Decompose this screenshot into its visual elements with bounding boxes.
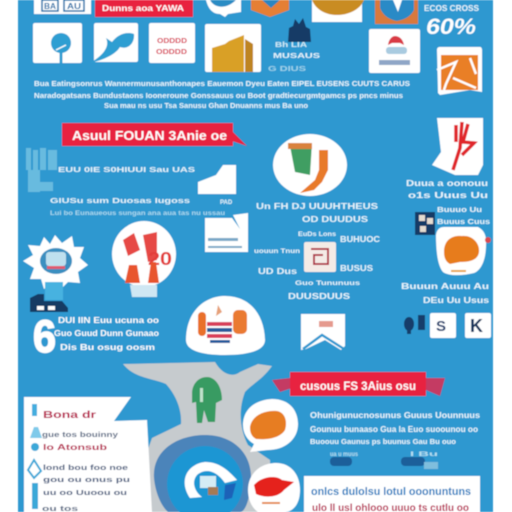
icon: white label tile bbox=[34, 0, 91, 14]
icon: starburst badge bbox=[23, 235, 88, 300]
icons: small tiles row bbox=[404, 313, 491, 338]
top row of icons bbox=[34, 0, 418, 24]
intro paragraph: Naradogatsans Bundustaons Iooneroune Gonssauus ou Boot gradtiecurgmtgamcs ps pncs minus bbox=[34, 91, 403, 100]
center top label group bbox=[268, 18, 320, 73]
top right statistic: 60% bbox=[426, 14, 476, 39]
center text block: DUUSDUUS bbox=[288, 292, 351, 301]
right text block: Buuuo Uu bbox=[437, 207, 482, 214]
bottom-left white panel: lond bou foo noe bbox=[43, 465, 128, 472]
left text block: EUU 0IE S0HIUUI Sau UAS bbox=[58, 165, 195, 174]
icon: red text tile: ODDDD bbox=[157, 38, 187, 45]
center text block: OD DUUDUS bbox=[302, 215, 369, 224]
center text block: EuDs Lons bbox=[298, 231, 336, 238]
left text block: Lui bo Eunaueous sungan ana aua tas nu ussau bbox=[50, 211, 225, 217]
icon: dark silhouette bbox=[288, 18, 311, 42]
right text block: Buuun Auuu Au bbox=[401, 281, 489, 291]
gray tree backdrop bbox=[123, 362, 272, 512]
center text block: Un FH DJ UUUHTHEUS bbox=[256, 202, 379, 211]
icon: blue tree tile bbox=[33, 23, 82, 63]
intro paragraph: Bua Eatingsonrus Wannermunusanthonapes Eauemon Dyeu Eaten EIPEL EUSENS CUUTS CARUS bbox=[34, 79, 410, 88]
icon: white label tile: AU bbox=[67, 2, 81, 11]
icon: orange bubble bbox=[243, 399, 298, 452]
icon: red cap card bbox=[369, 29, 420, 73]
large numeral with text: DUI IIN Euu ucuna oo bbox=[58, 315, 159, 325]
icon: K tile: K bbox=[470, 316, 483, 336]
bottom-left white panel bbox=[24, 397, 152, 512]
small pills bbox=[330, 457, 438, 469]
second row tiles bbox=[33, 23, 261, 72]
icon: white label tile: BA bbox=[44, 2, 56, 11]
top right statistic bbox=[424, 3, 479, 39]
right lower paragraph: ua u muus bbox=[330, 452, 359, 458]
large numeral with text bbox=[33, 311, 159, 362]
icon: gold buildings tile bbox=[205, 24, 261, 72]
bottom-left white panel: lo Atonsub bbox=[43, 443, 107, 452]
bottom-left white panel: uu oo Uuoou ou bbox=[43, 490, 127, 497]
icon: red spiral tile bbox=[304, 242, 336, 272]
bottom-left white panel: gue tos bouinny bbox=[42, 432, 118, 439]
section banner: left: Asuul FOUAN 3Anie oe bbox=[72, 128, 227, 143]
center text block: BUHUOC bbox=[340, 235, 380, 244]
icon: gold bowl bbox=[312, 0, 364, 22]
large numeral with text: Guo Guud Dunn Gunaao bbox=[54, 328, 159, 338]
left text block: GIUSu sum Duosas Iugoss bbox=[50, 196, 190, 205]
top right statistic: ECOS CROSS bbox=[424, 3, 479, 13]
center text block: uouun Tnun bbox=[254, 249, 300, 255]
right lower paragraph bbox=[310, 411, 481, 458]
icon: white notch shape: PAD bbox=[220, 200, 233, 206]
center top label group: G DIUS bbox=[268, 66, 307, 73]
icon: red text tile bbox=[149, 23, 195, 63]
right lower paragraph: Gounuu bunaaso Gua Ia Euo suoounou oo bbox=[310, 425, 478, 434]
left text block bbox=[50, 165, 225, 217]
icon: code tile: S bbox=[436, 318, 446, 335]
icon: red circle illustration bbox=[112, 221, 176, 297]
icon: orange tile bbox=[437, 47, 482, 95]
center text block: BUSUS bbox=[340, 264, 374, 273]
center text block: UD Dus bbox=[258, 267, 298, 276]
icon: dark vehicle bbox=[30, 294, 68, 312]
icon: red bubble bbox=[248, 463, 300, 512]
icon: dark drops bbox=[404, 315, 425, 334]
icon: white notch shape bbox=[198, 165, 236, 206]
top red banner: Dunns aoa YAWA bbox=[102, 4, 184, 13]
bottom-left white panel: gou ou onus pu bbox=[43, 477, 130, 484]
icon: red circle illustration: 20 bbox=[148, 249, 172, 269]
icon: blue swoosh tile bbox=[90, 23, 138, 63]
intro paragraph: Sua mau ns usu Tsa Sanusu Ghan Dnuanns mus Ba uno bbox=[104, 101, 308, 110]
icon: blue circular badge bbox=[154, 435, 251, 512]
center top label group: Bh LIA bbox=[275, 42, 307, 49]
icon: green figure bbox=[192, 377, 222, 423]
large numeral with text: 6 bbox=[33, 311, 56, 362]
top red banner bbox=[95, 0, 193, 17]
icon: white pointer card bbox=[205, 213, 248, 252]
large numeral with text: Dis Bu osug oosm bbox=[60, 342, 156, 352]
section banner: right bbox=[272, 372, 445, 396]
center text block: Guo Tununuus bbox=[295, 280, 361, 287]
icon: orange shield right bbox=[375, 0, 418, 24]
icon: blue crest bbox=[206, 0, 241, 17]
center top label group: MUSAUS bbox=[273, 53, 320, 60]
right text block bbox=[401, 178, 490, 305]
icon: white shield with red mark bbox=[432, 118, 483, 175]
icon: dark code block bbox=[415, 212, 435, 235]
right lower paragraph: Buoouu Gaunus ps buunus Gau Bu ouo bbox=[310, 439, 456, 446]
right lower paragraph: I Bu bbox=[410, 452, 439, 458]
icon: orange blob tile bbox=[436, 227, 491, 275]
bottom-right white panel bbox=[304, 476, 480, 512]
bottom-left white panel: Bona dr bbox=[43, 410, 96, 421]
right text block: o1s Uuus Uu bbox=[408, 190, 488, 200]
right lower paragraph: Ohunigunucnosunus Guuus Uounnuus bbox=[310, 411, 481, 420]
right text block: Duua a oonouu bbox=[406, 178, 488, 188]
bottom-right white panel: onlcs dulolsu lotul ooonuntuns bbox=[311, 486, 471, 498]
intro paragraph bbox=[34, 79, 410, 110]
icon: white blob with clothing bbox=[186, 296, 265, 355]
center text block bbox=[254, 202, 380, 301]
section banner: left bbox=[62, 123, 247, 146]
right text block: DEu Uu Usus bbox=[423, 295, 489, 305]
icon: white envelope bbox=[301, 314, 345, 350]
icon: red text tile: ODDDD bbox=[156, 49, 187, 56]
small bar chart bbox=[26, 148, 57, 192]
section banner: right: cusous FS 3Aius osu bbox=[300, 379, 416, 393]
right text block: Buuus Cuus bbox=[437, 219, 490, 226]
icon: circle with green and orange figure bbox=[273, 134, 347, 196]
icon: orange shield left bbox=[251, 0, 289, 17]
